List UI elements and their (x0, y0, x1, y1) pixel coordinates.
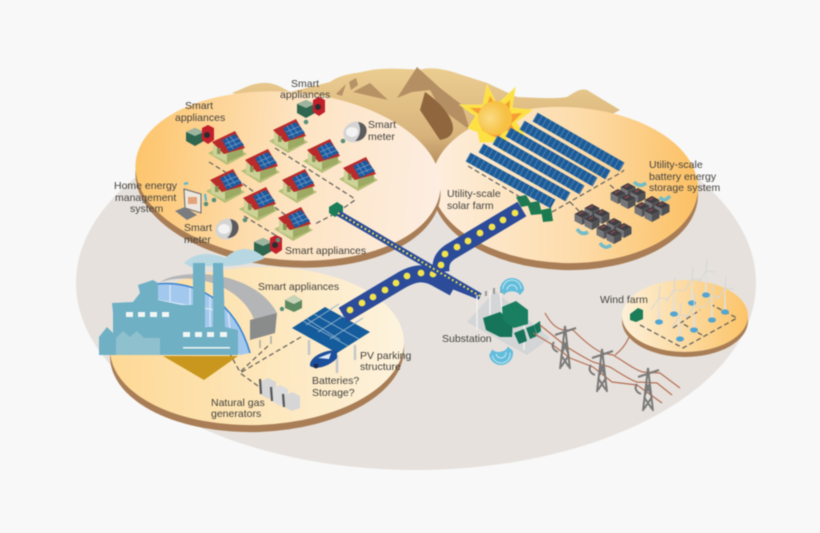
factory (99, 249, 265, 380)
label: wind farm: Wind farm (600, 294, 648, 306)
panel: microgrid neighbourhood platform: appliances (280, 89, 330, 101)
panel: solar farm platform: battery energy (649, 171, 717, 183)
battery packs (574, 182, 670, 247)
background ground ellipse (76, 96, 756, 470)
panel: campus platform: Batteries? (312, 375, 359, 387)
wind turbines (651, 259, 734, 342)
panel: microgrid neighbourhood platform: appliances (175, 112, 225, 124)
labels: Smart (185, 100, 213, 112)
panel: microgrid neighbourhood platform: management (115, 192, 176, 204)
solar panel rows (468, 117, 622, 204)
panel: solar farm platform: solar farm (447, 200, 494, 212)
panel: microgrid neighbourhood platform: Home energy (114, 180, 178, 192)
panel: campus platform: Natural gas (211, 397, 265, 409)
panel: campus platform: PV parking (360, 350, 412, 362)
panel: microgrid neighbourhood platform: Smart (368, 119, 396, 131)
PV parking structure (292, 304, 370, 373)
panel: microgrid neighbourhood platform: meter (368, 131, 395, 143)
dashed wiring (225, 337, 301, 386)
road network (338, 209, 522, 315)
inverters (516, 195, 553, 222)
panel: solar farm platform (429, 85, 720, 275)
substation (442, 278, 550, 367)
panel: microgrid neighbourhood platform (114, 78, 448, 280)
natural gas generators (260, 378, 300, 411)
panel: campus platform: generators (211, 408, 261, 420)
green connection box (329, 202, 343, 217)
mountains (232, 67, 620, 190)
panel: microgrid neighbourhood platform: system (130, 203, 164, 215)
labels: Smart appliances (258, 281, 339, 293)
panel: microgrid neighbourhood platform: meter (184, 234, 211, 246)
dashed wiring (640, 305, 737, 348)
panel: microgrid neighbourhood platform: Smart (184, 222, 212, 234)
panel: wind farm platform (600, 259, 748, 357)
power lines (533, 313, 680, 411)
appliances and meters (186, 97, 370, 256)
icon: computer (175, 183, 206, 220)
label: substation: Substation (442, 333, 492, 345)
smart appliance (280, 295, 302, 312)
panel: solar farm platform: storage system (649, 182, 720, 194)
houses (206, 119, 378, 241)
panel: campus platform: Storage? (312, 387, 355, 399)
dashed wiring (209, 148, 355, 238)
label: solar farm: Utility-scale (447, 188, 501, 200)
panel: microgrid neighbourhood platform: Smart appliances (285, 245, 366, 257)
sun (460, 85, 532, 152)
panel: campus platform: structure (360, 361, 401, 373)
panel: microgrid neighbourhood platform: Smart (291, 78, 319, 90)
label: battery storage: Utility-scale (649, 159, 703, 171)
panel: campus platform (99, 249, 412, 437)
glass building (157, 274, 277, 355)
green box (630, 308, 643, 322)
dashed wiring (468, 166, 625, 222)
